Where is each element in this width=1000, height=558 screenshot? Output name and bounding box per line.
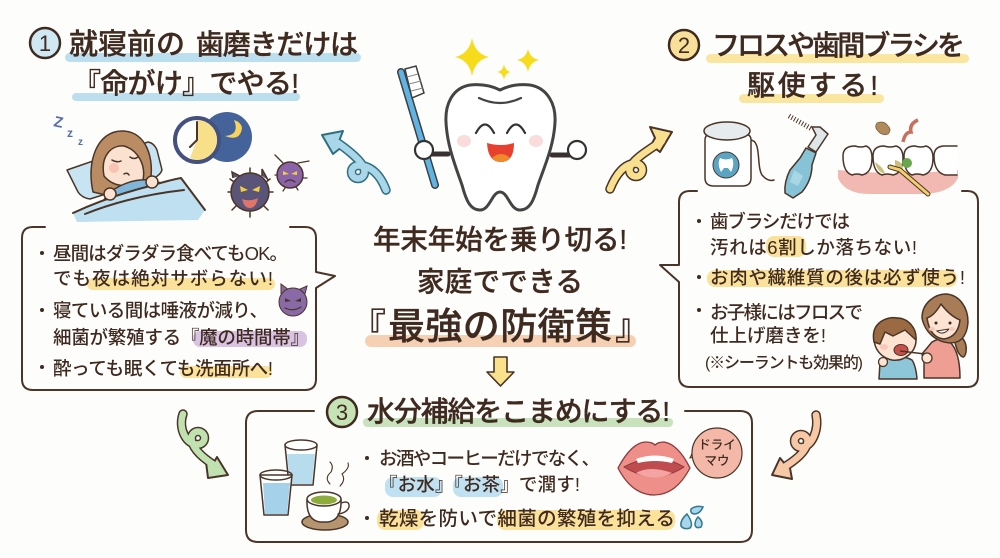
heading 1 [30, 28, 361, 101]
panel: bedtime brushing: 酔っても眠くても洗面所へ! [53, 358, 273, 379]
icon: floss box [704, 122, 774, 186]
arrow: down [487, 357, 514, 386]
icon: teeth with plaque [838, 120, 958, 194]
illustration: sleeping woman: Z [52, 113, 65, 132]
illustration: sleeping woman [52, 113, 205, 222]
panel: floss tips: お肉や繊維質の後は必ず使う! [710, 267, 965, 288]
heading 2: フロスや歯間ブラシを [712, 30, 965, 61]
callout: dry mouth: マウ [704, 454, 730, 468]
panel: floss tips: (※シーラントも効果的) [705, 354, 863, 372]
center title: 最強の防衛策 [388, 306, 612, 347]
arrow: green to step 3 [181, 414, 228, 478]
icon: devil face [279, 284, 307, 316]
arrow: salmon to step 3 [772, 415, 817, 479]
icon: interdental brush [785, 116, 828, 198]
icon: sweat drops [681, 506, 703, 529]
center title: 『 [350, 306, 386, 347]
center title [350, 224, 651, 347]
arrow: blue to step 1 [322, 131, 386, 190]
panel: hydration [246, 411, 752, 542]
illustration: sleeping woman: z [67, 126, 73, 140]
panel: floss tips [660, 191, 978, 387]
panel: floss tips: お子様にはフロスで [710, 302, 863, 323]
icon: glasses of water [260, 440, 317, 515]
heading 3: 水分補給をこまめにする! [367, 396, 670, 427]
arrow: yellow to step 2 [610, 127, 672, 189]
icon: dry lips [618, 442, 690, 495]
heading 1: 1 [39, 31, 51, 56]
icon: sparkles [455, 38, 539, 80]
panel: bedtime brushing: 細菌が繁殖する『魔の時間帯』 [53, 327, 309, 348]
icon: toothbrush [401, 66, 435, 185]
icon: night clock [175, 112, 252, 162]
panel: bedtime brushing [22, 227, 335, 390]
panel: bedtime brushing: 昼間はダラダラ食べてもOK。 [53, 243, 288, 264]
panel: hydration: 『お水』『お茶』で潤す! [379, 474, 580, 495]
panel: floss tips: 仕上げ磨きを! [710, 325, 826, 346]
heading 2: 2 [678, 33, 690, 58]
heading 1: 就寝前の [69, 28, 185, 61]
illustration: sleeping woman: z [78, 137, 83, 148]
panel: bedtime brushing: でも夜は絶対サボらない! [53, 268, 273, 289]
center title: 家庭でできる [417, 266, 583, 297]
heading 1: 『命がけ』でやる! [73, 68, 299, 99]
panel: hydration: 乾燥を防いで細菌の繁殖を抑える [379, 508, 675, 530]
heading 2: 駆使する! [747, 70, 878, 101]
center title: 年末年始を乗り切る! [373, 224, 627, 255]
icon: large germ [228, 168, 273, 217]
panel: floss tips: 歯ブラシだけでは [710, 211, 850, 232]
panel: hydration: お酒やコーヒーだけでなく、 [379, 448, 600, 469]
icon: green tea [302, 462, 349, 530]
callout: dry mouth [690, 428, 742, 478]
callout: dry mouth: ドライ [698, 438, 736, 452]
panel: floss tips: 汚れは6割しか落ちない! [710, 237, 917, 258]
heading 2 [669, 30, 969, 103]
icon: small germ [275, 155, 309, 191]
panel: bedtime brushing: 寝ている間は唾液が減り、 [53, 300, 268, 321]
heading 1: 歯磨きだけは [196, 29, 358, 60]
icon: tooth mascot [415, 85, 586, 210]
illustration: mother and child [873, 294, 968, 379]
center title: 』 [615, 306, 651, 347]
heading 3: 3 [336, 400, 348, 425]
